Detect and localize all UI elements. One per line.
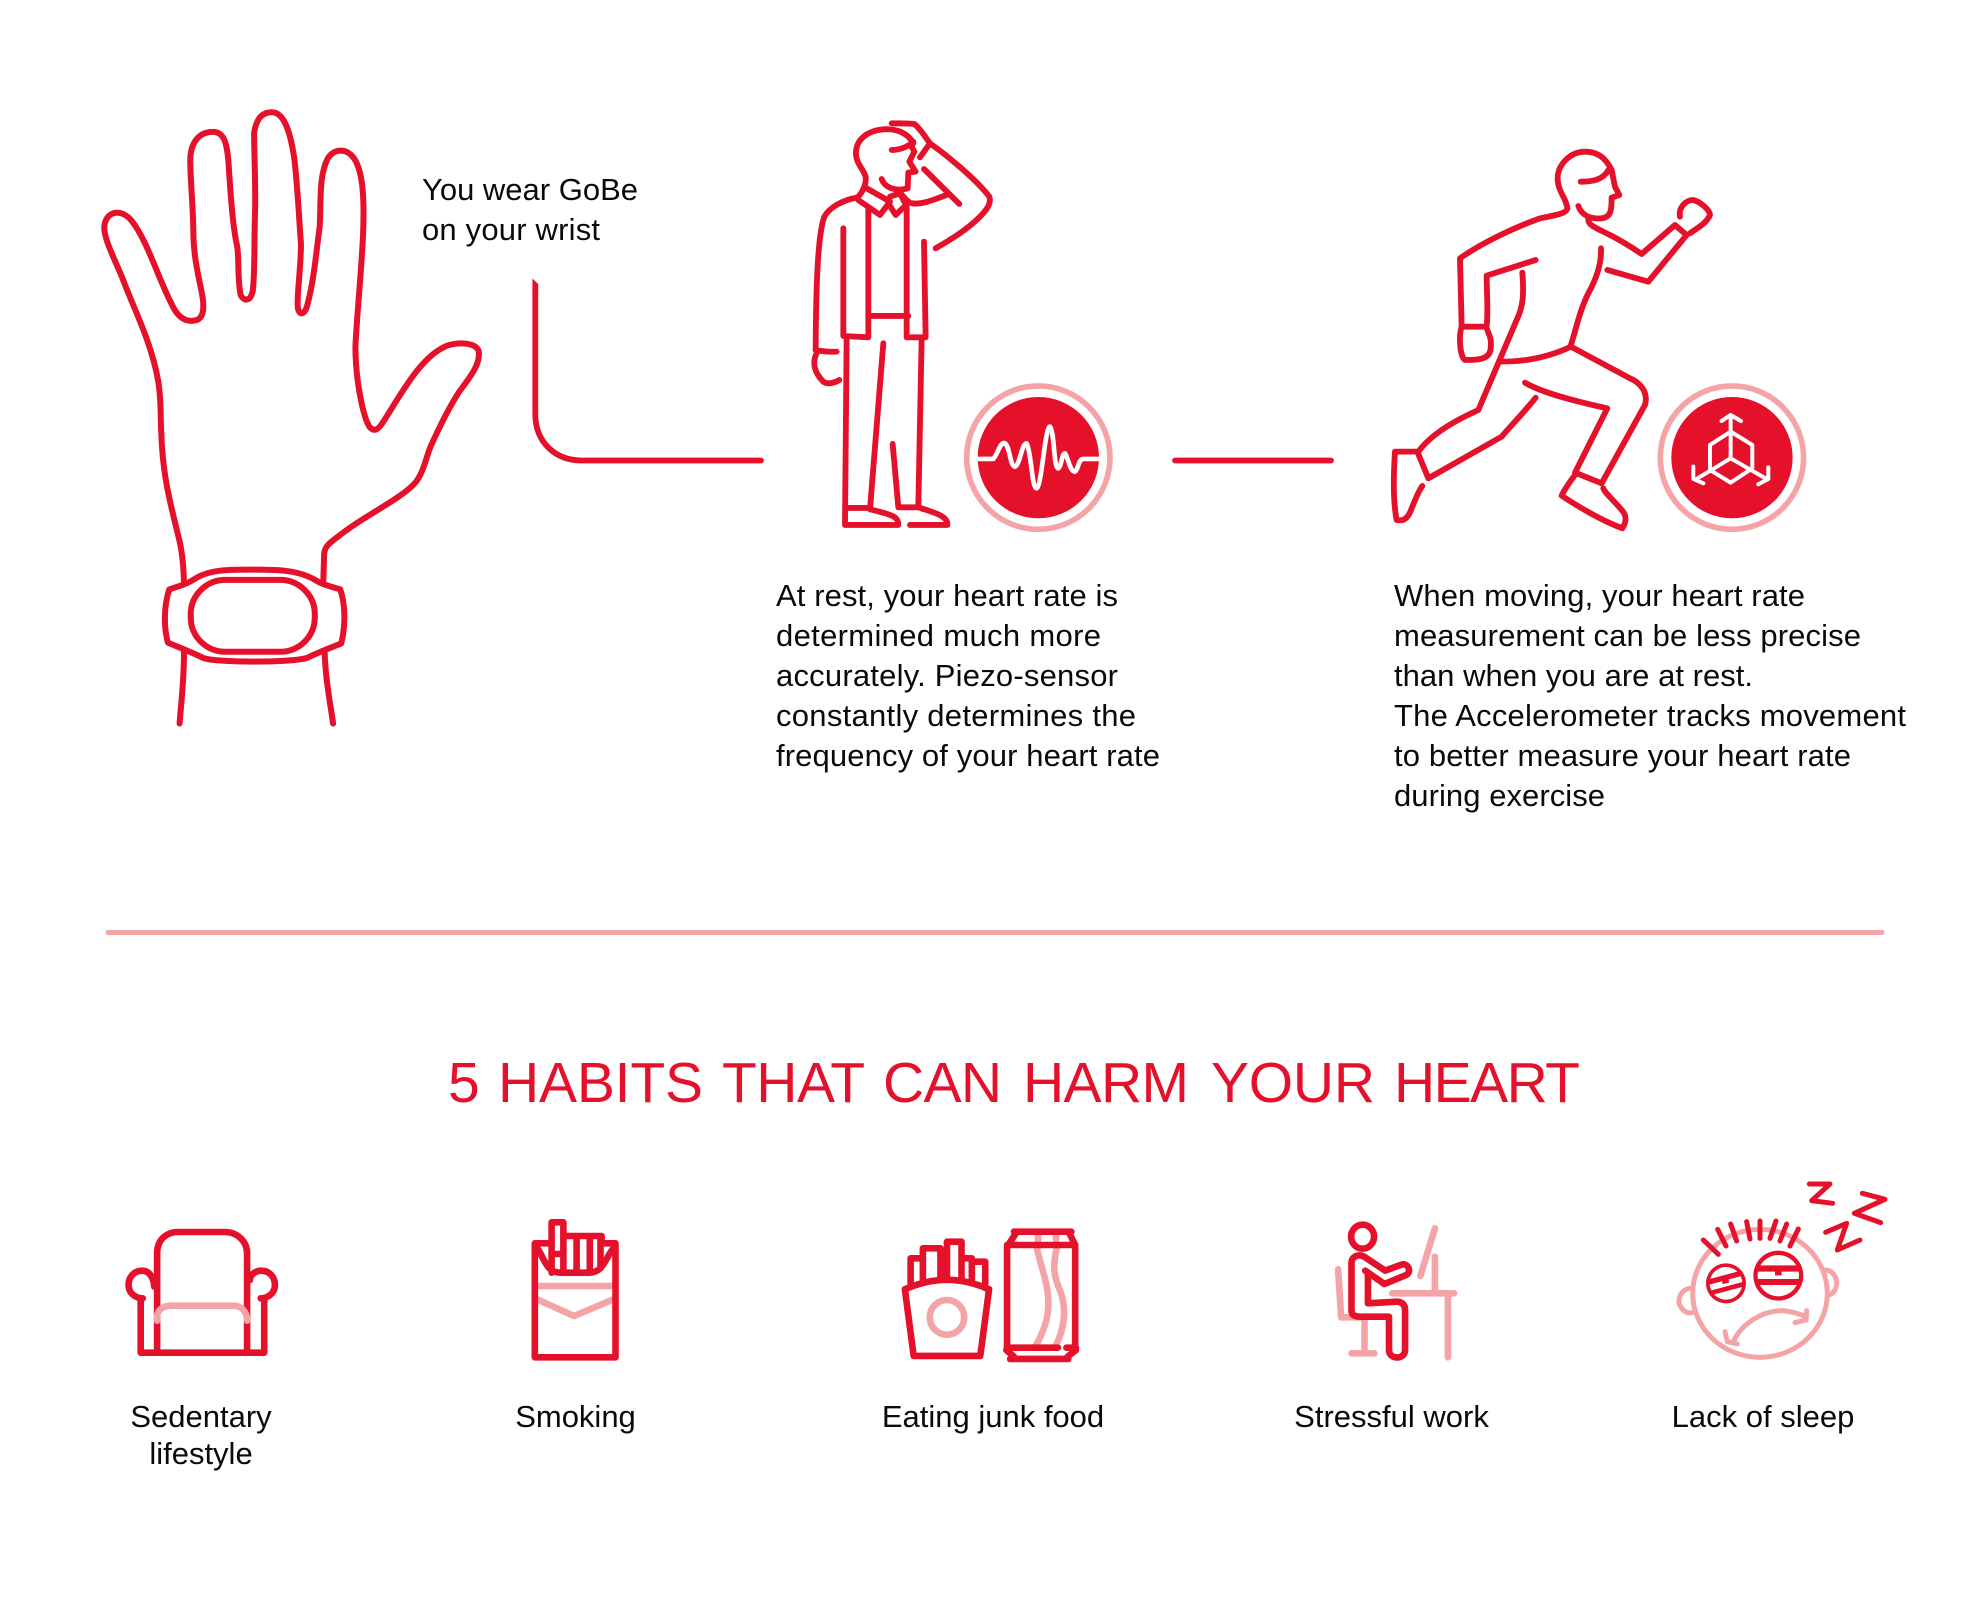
label: sedentary lifestyle: lifestyle: [149, 1436, 253, 1471]
arrow: connector from wrist to resting figure: [532, 278, 761, 460]
heading: 5 habits: HARM: [1023, 1051, 1189, 1115]
heading: 5 habits: 5: [448, 1051, 480, 1115]
text: when moving description: measurement can be less precise: [1394, 618, 1861, 653]
icon: cigarette pack: [535, 1222, 616, 1357]
label: eating junk food: Eating junk food: [882, 1399, 1104, 1434]
icon: fries and soda can: [905, 1232, 1076, 1359]
label: lack of sleep: Lack of sleep: [1672, 1399, 1854, 1434]
text: at rest description: At rest, your heart rate is: [776, 578, 1118, 613]
icon: person at desk: [1338, 1225, 1454, 1357]
heading: 5 habits: CAN: [883, 1051, 1002, 1115]
text: at rest description: determined much more: [776, 618, 1101, 653]
icon: hand wearing GoBe band: [104, 112, 479, 724]
text: you wear GoBe: You wear GoBe: [422, 172, 638, 207]
icon: running man: [1394, 152, 1710, 528]
heading: 5 habits: HABITS: [498, 1051, 703, 1115]
text: when moving description: during exercise: [1394, 778, 1605, 813]
icon: heart-rate badge: [967, 386, 1110, 529]
icon: sleepy face: [1679, 1184, 1885, 1357]
label: smoking: Smoking: [515, 1399, 636, 1434]
text: when moving description: than when you are at rest.: [1394, 658, 1753, 693]
label: stressful work: Stressful work: [1294, 1399, 1489, 1434]
arrow: connector between figures: [1175, 458, 1331, 463]
label: sedentary lifestyle: Sedentary: [130, 1399, 272, 1434]
heading: 5 habits: HEART: [1394, 1051, 1580, 1115]
text: at rest description: frequency of your heart rate: [776, 738, 1160, 773]
icon: man standing at rest: [814, 123, 990, 525]
heading: 5 habits: YOUR: [1211, 1051, 1375, 1115]
icon: armchair: [129, 1232, 275, 1353]
icon: accelerometer badge: [1660, 386, 1804, 529]
text: you wear GoBe: on your wrist: [422, 212, 600, 247]
text: at rest description: accurately. Piezo-sensor: [776, 658, 1118, 693]
heading: 5 habits: THAT: [722, 1051, 864, 1115]
text: when moving description: The Accelerometer tracks movement: [1394, 698, 1906, 733]
text: when moving description: to better measure your heart rate: [1394, 738, 1851, 773]
text: when moving description: When moving, your heart rate: [1394, 578, 1805, 613]
text: at rest description: constantly determines the: [776, 698, 1136, 733]
